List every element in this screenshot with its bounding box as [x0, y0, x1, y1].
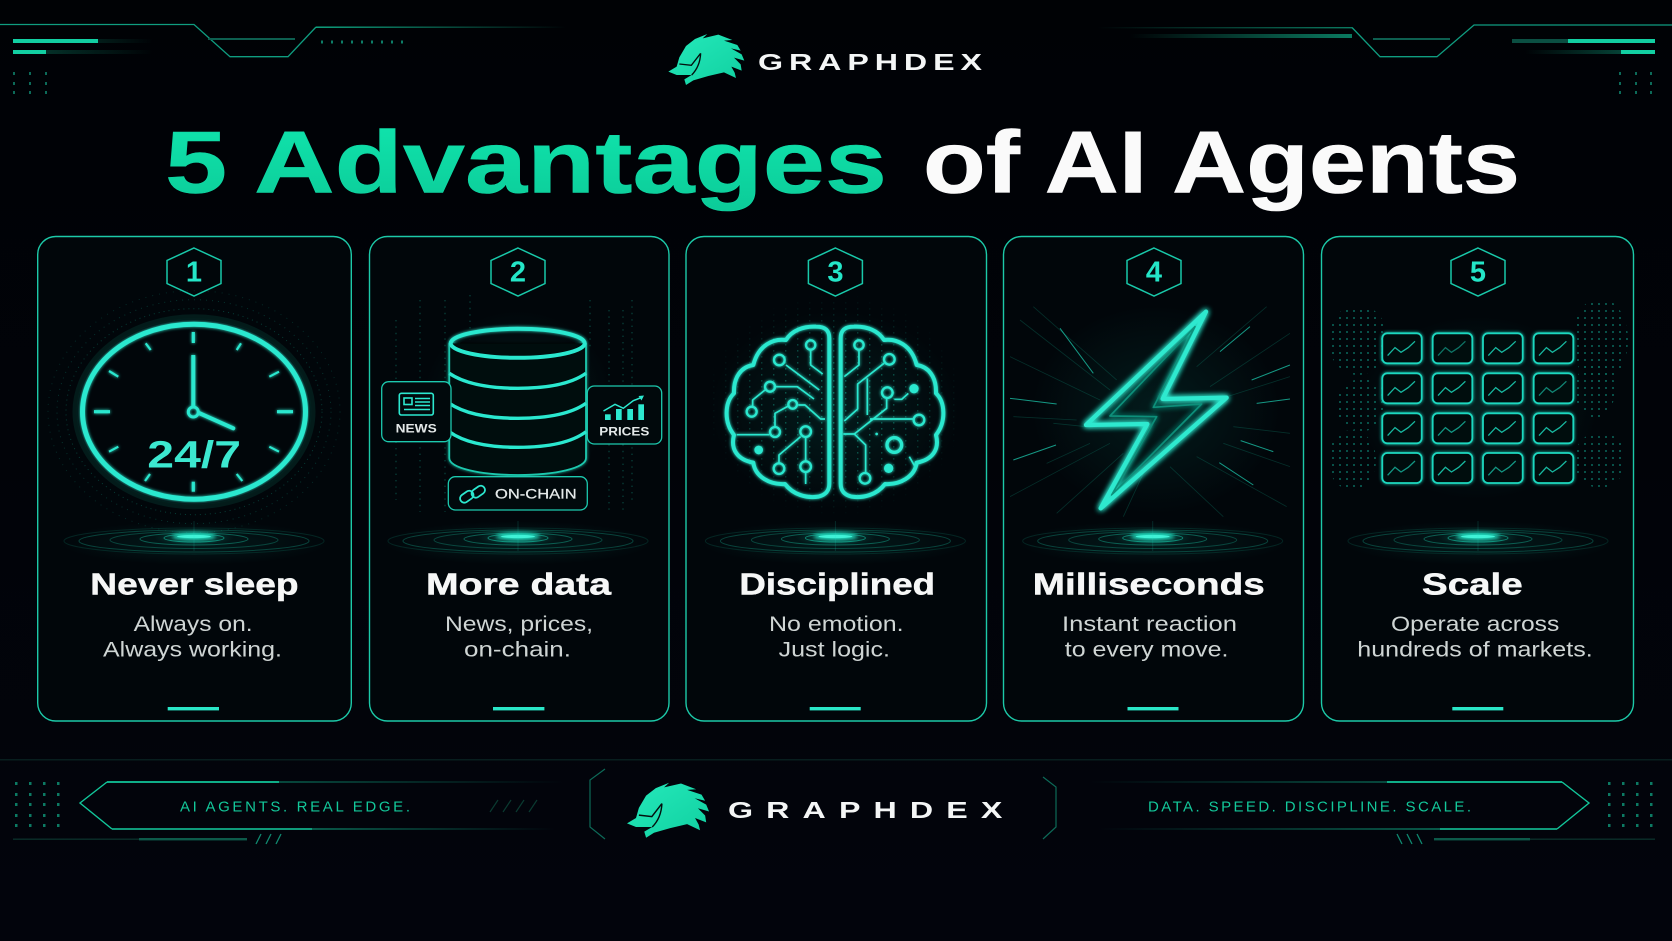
heading: Disciplined — [739, 567, 935, 601]
description — [103, 613, 282, 662]
description: News, prices, — [445, 613, 593, 636]
prices tag: PRICES — [599, 425, 649, 439]
icon: 24/7 clock: 24/7 — [147, 435, 241, 477]
description — [1357, 613, 1593, 662]
light platform — [1018, 521, 1288, 565]
light platform — [700, 521, 970, 565]
number badge 3: 3 — [827, 256, 843, 288]
title: of AI Agents — [923, 113, 1520, 212]
title: 5 Advantages — [165, 113, 887, 212]
icon: market chart grid — [1328, 298, 1628, 500]
heading: Never sleep — [90, 567, 299, 601]
heading: Scale — [1422, 567, 1523, 601]
accent bar — [1128, 707, 1178, 710]
banner text: AI AGENTS. REAL EDGE. — [180, 798, 410, 816]
light platform — [59, 521, 329, 565]
banner text: DATA. SPEED. DISCIPLINE. SCALE. — [1148, 798, 1471, 816]
footer right dot grid — [1608, 782, 1652, 827]
number badge 4: 4 — [1146, 256, 1162, 288]
footer centre logo — [590, 769, 1056, 839]
icon: lightning bolt — [1010, 305, 1290, 517]
number badge 1: 1 — [186, 256, 202, 288]
heading: More data — [426, 567, 612, 601]
icon: 24/7 clock — [48, 291, 340, 533]
description: Just logic. — [779, 639, 890, 662]
right hemisphere — [841, 327, 943, 497]
description: on-chain. — [464, 639, 571, 662]
light platform — [1343, 521, 1613, 565]
panel: disciplined — [686, 236, 986, 721]
news tag: NEWS — [396, 422, 437, 436]
icon: lion head — [627, 783, 709, 838]
icon: lion head — [668, 34, 744, 85]
heading: Milliseconds — [1033, 567, 1265, 601]
on-chain tag: ON-CHAIN — [495, 486, 577, 502]
left hemisphere — [727, 327, 829, 497]
logo wordmark: GRAPHDEX — [728, 797, 1003, 823]
panel: more data — [370, 236, 669, 721]
description — [445, 613, 593, 662]
description: Always working. — [103, 639, 282, 662]
title — [165, 113, 1520, 212]
top left frame decoration — [0, 24, 566, 94]
footer left banner — [13, 781, 565, 844]
accent bar — [1452, 707, 1503, 710]
prices tag — [587, 386, 662, 444]
light platform — [383, 521, 653, 565]
number badge 1 — [167, 248, 221, 296]
description: Instant reaction — [1062, 613, 1237, 636]
description: to every move. — [1065, 639, 1228, 662]
number badge 5 — [1451, 248, 1505, 296]
icon: circuit brain — [713, 302, 954, 508]
header logo — [668, 34, 982, 85]
panel: never sleep — [38, 236, 351, 721]
accent bar — [493, 707, 544, 710]
accent bar — [810, 707, 861, 710]
panel: milliseconds — [1004, 236, 1304, 721]
description: Always on. — [134, 613, 253, 636]
description: Operate across — [1391, 613, 1559, 636]
description — [769, 613, 904, 662]
number badge 4 — [1127, 248, 1181, 296]
number badge 3 — [808, 248, 862, 296]
on-chain tag — [448, 477, 587, 510]
logo wordmark: GRAPHDEX — [758, 49, 982, 75]
news tag — [382, 382, 451, 442]
footer left dot grid — [15, 782, 60, 827]
description: hundreds of markets. — [1357, 639, 1593, 662]
database cylinder — [449, 329, 586, 475]
panel: scale — [1322, 236, 1634, 721]
description: No emotion. — [769, 613, 904, 636]
top right frame decoration — [1098, 25, 1672, 94]
number badge 5: 5 — [1470, 256, 1486, 288]
footer right banner — [1088, 781, 1655, 844]
number badge 2 — [491, 248, 545, 296]
icon: database with data sources — [382, 295, 662, 512]
footer rule — [0, 759, 1672, 760]
accent bar — [168, 707, 219, 710]
number badge 2: 2 — [510, 256, 526, 288]
description — [1062, 613, 1237, 662]
